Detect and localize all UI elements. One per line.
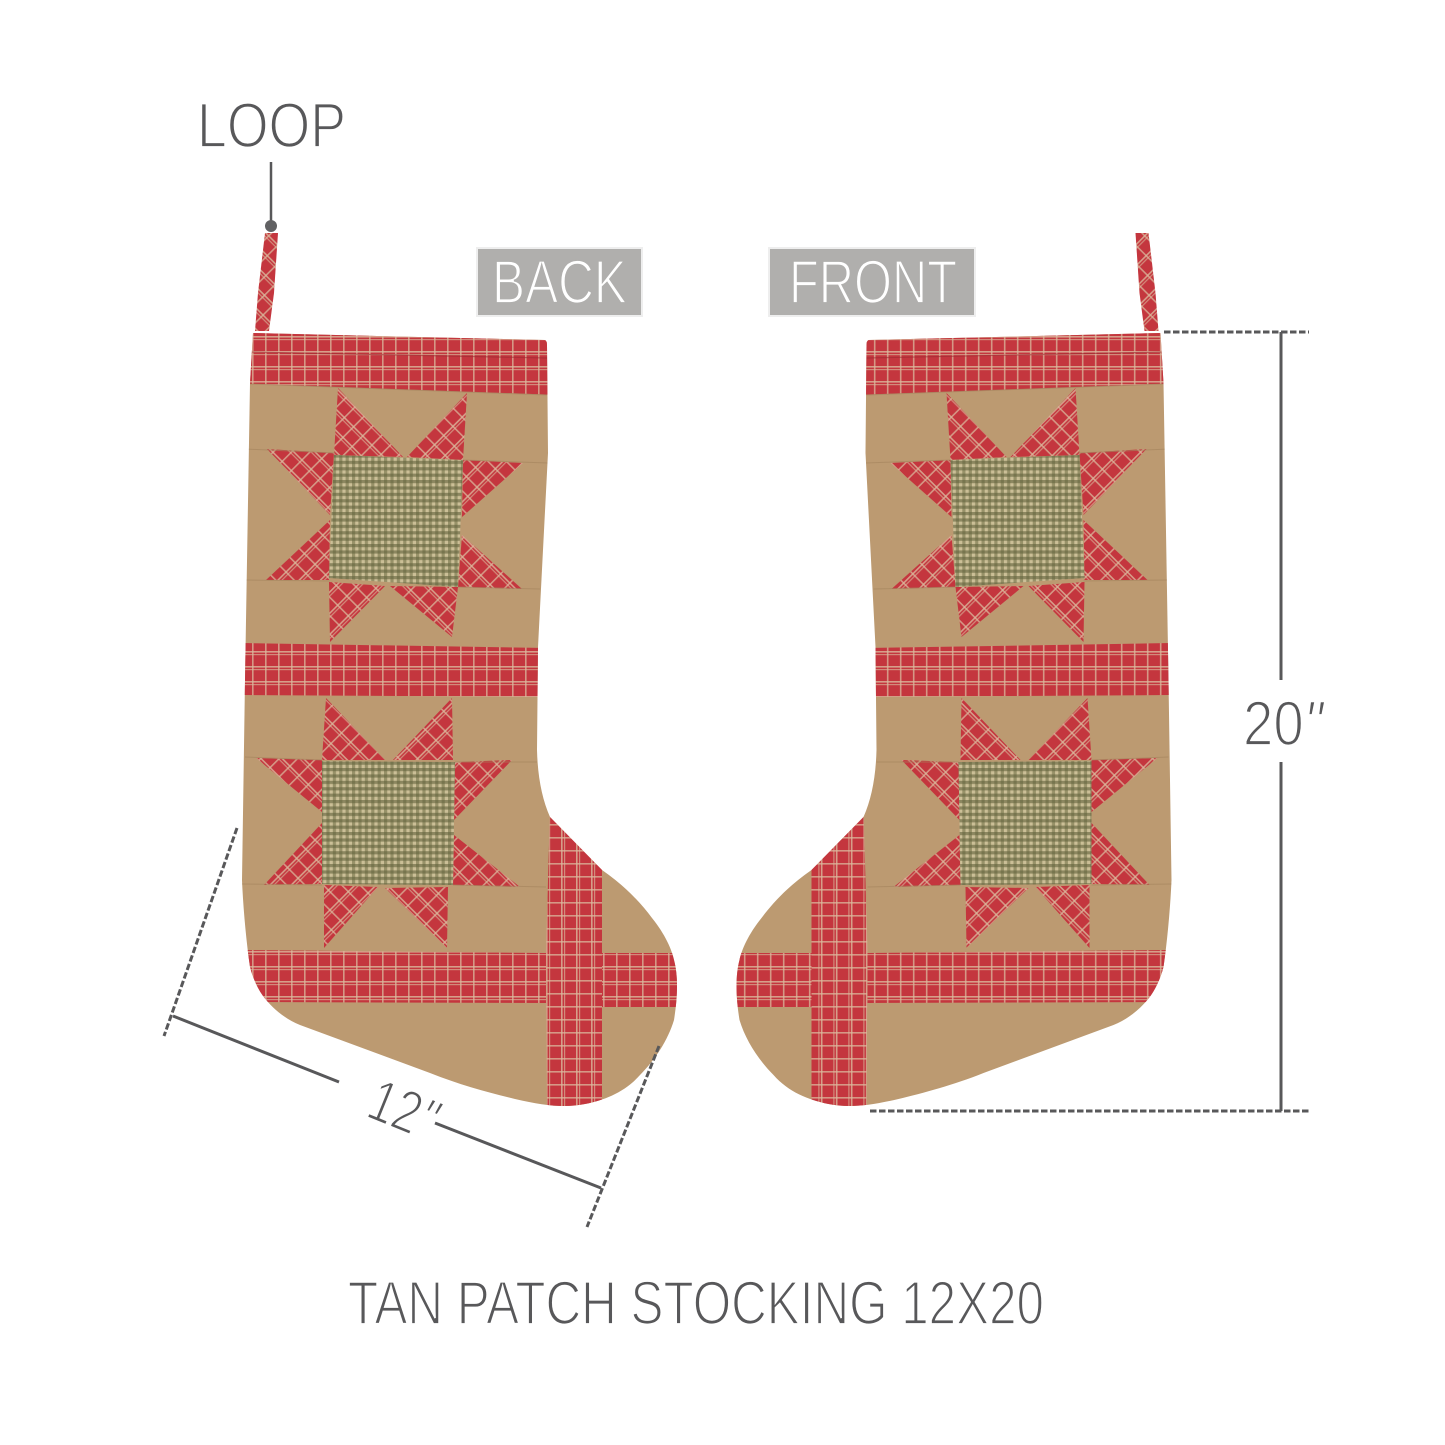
gingham centre square xyxy=(329,455,463,587)
vertical band xyxy=(812,810,868,1110)
loop label: LOOP xyxy=(197,91,346,161)
loop leader line xyxy=(265,162,277,232)
gingham centre square xyxy=(958,761,1092,885)
height dimension: 20 inches: 20" xyxy=(1243,689,1325,759)
toe band xyxy=(732,953,812,1007)
gingham centre square xyxy=(950,455,1084,587)
width dimension: 12 inches xyxy=(164,828,659,1227)
star points xyxy=(256,698,520,948)
title: TAN PATCH STOCKING 12X20 xyxy=(348,1269,1044,1337)
back stocking xyxy=(230,233,690,1120)
upper star block xyxy=(266,388,523,642)
front badge: FRONT xyxy=(789,248,957,316)
star points xyxy=(890,388,1148,642)
bottom band xyxy=(868,950,1174,1003)
vertical band xyxy=(546,810,602,1110)
cuff band xyxy=(866,333,1164,395)
width dimension: 12 inches: 12" xyxy=(359,1066,449,1154)
upper star block xyxy=(890,388,1148,642)
tan base fabric xyxy=(230,320,690,1120)
lower star block xyxy=(256,698,520,948)
gingham centre square xyxy=(322,761,455,885)
lower star block xyxy=(894,698,1158,948)
cuff band xyxy=(250,333,548,395)
middle band xyxy=(868,643,1174,697)
back badge: BACK xyxy=(492,248,627,316)
bottom band xyxy=(240,950,546,1003)
loop: front xyxy=(1136,233,1158,331)
star points xyxy=(894,698,1158,948)
toe band xyxy=(602,953,682,1007)
tan base fabric xyxy=(724,320,1184,1120)
middle band xyxy=(240,643,545,697)
star points xyxy=(266,388,523,642)
front stocking xyxy=(724,233,1184,1120)
stocking body: front xyxy=(724,320,1184,1120)
stocking body: back xyxy=(230,320,690,1120)
loop: back xyxy=(255,233,278,331)
